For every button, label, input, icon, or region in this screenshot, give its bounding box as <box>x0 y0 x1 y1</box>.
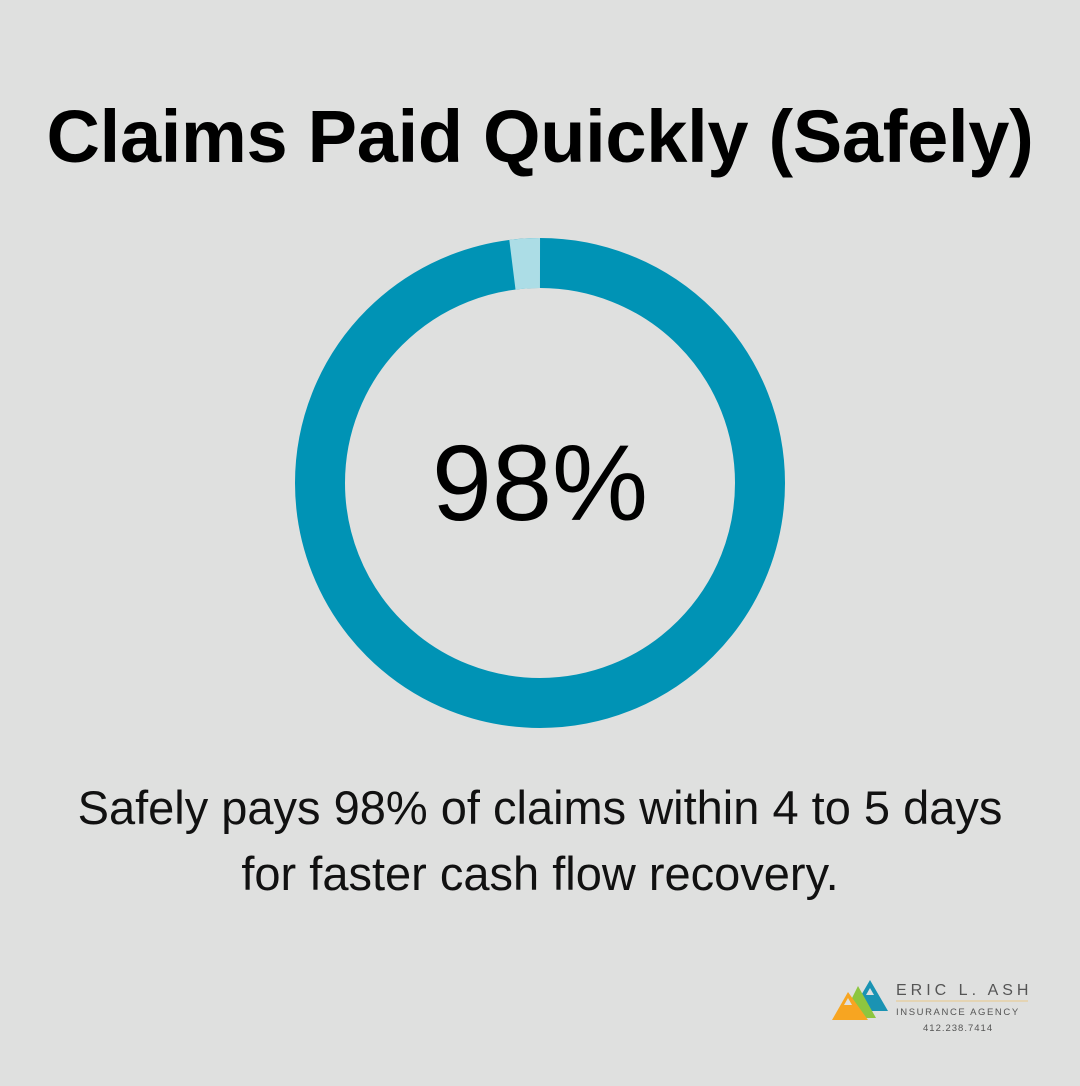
donut chart: 98% <box>432 422 648 543</box>
body text: for faster cash flow recovery. <box>241 847 839 900</box>
title: Claims Paid Quickly (Safely) <box>47 95 1033 178</box>
logo <box>832 980 1032 1034</box>
logo: ERIC L. ASH <box>896 982 1032 999</box>
logo: 412.238.7414 <box>923 1023 993 1034</box>
body text <box>78 781 1002 900</box>
body text: Safely pays 98% of claims within 4 to 5 days <box>78 781 1002 834</box>
logo: INSURANCE AGENCY <box>896 1007 1020 1018</box>
